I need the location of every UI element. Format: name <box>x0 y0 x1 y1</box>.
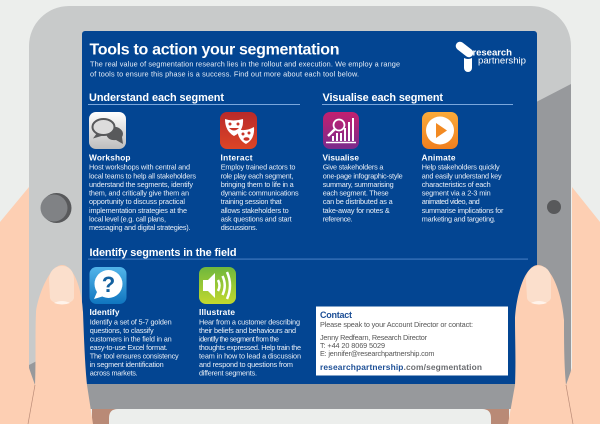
tool: workshop: local teams to help all stakeholders <box>89 171 196 180</box>
tool: visualise: summary, summarising <box>323 180 394 189</box>
tool: identify: across markets. <box>90 368 138 378</box>
intro text: of tools to ensure this phase is a success. Find out more about each tool below. <box>90 70 359 78</box>
icon: chart and magnifier <box>323 112 359 149</box>
tool: interact: ask questions and start <box>221 214 292 223</box>
tool: workshop: them, and critically give them an <box>89 189 189 198</box>
logo: research partnership: research <box>472 48 512 58</box>
tool: interact: dynamic communications <box>221 189 299 198</box>
screen <box>82 31 537 384</box>
intro text: The real value of segmentation research lies in the rollout and execution. We employ a range <box>90 60 400 68</box>
tool: illustrate: identify the segment from the <box>199 334 279 344</box>
tool: interact: Interact <box>220 152 253 162</box>
tool: interact: role play each segment, <box>221 171 293 180</box>
tool: identify <box>90 267 179 378</box>
tool: animate: animated video, and <box>422 197 480 206</box>
tool: interact <box>220 112 299 232</box>
tool: interact: training session that <box>221 197 282 206</box>
tool: illustrate: different segments. <box>199 368 257 378</box>
tool: illustrate: Hear from a customer describing <box>199 318 300 326</box>
tool: visualise: one-page infographic-style <box>323 171 403 180</box>
nail <box>526 266 551 304</box>
tool: identify: customers in the field in an <box>90 334 172 344</box>
tool: animate <box>422 112 504 223</box>
tool: workshop: Host workshops with central and <box>89 162 190 172</box>
tool: identify: Identify a set of 5-7 golden <box>90 318 172 326</box>
tool: workshop: local level (e.g. call plans, <box>89 214 166 223</box>
tool: workshop: understand the segments, identify <box>89 180 193 189</box>
heading: understand: Understand each segment <box>89 92 224 104</box>
right camera dot <box>547 200 561 214</box>
tool: illustrate: thoughts expressed. Help train the <box>199 343 301 352</box>
palm <box>0 187 35 424</box>
tool: illustrate: Illustrate <box>199 307 235 317</box>
nail moon <box>54 301 70 304</box>
tool: workshop: opportunity to discuss practical <box>89 197 185 206</box>
tool: animate: marketing and targeting. <box>422 214 496 223</box>
tool: identify: Identify <box>90 307 120 317</box>
tool: visualise: each segment. These <box>323 189 389 198</box>
tool: identify: in segment identification <box>90 360 164 369</box>
tool: visualise: can be distributed as a <box>323 197 394 206</box>
contact box: Contact <box>320 310 352 320</box>
tool: visualise <box>322 112 403 223</box>
thumb <box>508 265 573 424</box>
tool: visualise: Give stakeholders a <box>323 162 384 172</box>
tool: illustrate <box>199 267 301 378</box>
contact box: T: +44 20 8069 5029 <box>320 341 385 350</box>
contact box: Please speak to your Account Director or contact: <box>320 320 473 329</box>
heading: identify segments: Identify segments in the field <box>90 247 236 259</box>
tool: animate: characteristics of each <box>422 180 491 189</box>
thumb <box>28 265 93 424</box>
tool: visualise: take-away for notes & <box>323 206 390 215</box>
crease <box>28 385 35 424</box>
tool: illustrate: their beliefs and behaviours and <box>199 326 296 335</box>
intro text <box>90 60 400 78</box>
logo: research partnership: partnership <box>478 56 526 66</box>
title: Tools to action your segmentation <box>90 42 340 58</box>
tool: animate: Help stakeholders quickly <box>422 162 500 172</box>
icon: play button <box>422 112 458 149</box>
contact box: E: jennifer@researchpartnership.com <box>320 349 434 358</box>
tool: illustrate: and respond to questions from <box>199 360 293 369</box>
icon: theatre masks <box>220 112 257 149</box>
tool: interact: discussions. <box>221 223 257 232</box>
tool: animate: summarise implications for <box>422 206 504 215</box>
tool: animate: Animate <box>422 152 456 162</box>
icon: speaker <box>199 267 236 304</box>
tool: identify: questions, to classify <box>90 326 154 335</box>
tool: workshop: Workshop <box>89 152 130 162</box>
tool: illustrate: team in how to lead a discussion <box>199 352 301 360</box>
nail <box>49 266 74 304</box>
left side button <box>40 193 72 223</box>
tool: visualise: Visualise <box>322 152 359 162</box>
tool: visualise: reference. <box>323 214 353 223</box>
tool: identify: The tool ensures consistency <box>90 352 179 360</box>
nail moon <box>531 301 547 304</box>
logo: research partnership <box>460 46 526 72</box>
tool: workshop <box>89 112 196 232</box>
tool: animate: segment via a 2-3 min <box>422 189 491 198</box>
tool: animate: and easily understand key <box>422 171 502 180</box>
crease <box>566 385 573 424</box>
icon: question bubble: ? <box>102 272 115 297</box>
tool: workshop: messaging and digital strategies). <box>89 223 190 232</box>
contact box <box>316 306 508 376</box>
right hand <box>508 187 600 424</box>
tool: interact: bringing them to life in a <box>221 180 295 189</box>
contact box: Jenny Redfearn, Research Director <box>320 333 428 342</box>
tool: workshop: implementation strategies at the <box>89 206 187 215</box>
palm <box>566 187 600 424</box>
desk panel below the tablet <box>92 405 509 424</box>
left hand <box>0 187 93 424</box>
contact box: researchpartnership.com/segmentation <box>320 362 482 372</box>
tool: interact: Employ trained actors to <box>221 162 295 172</box>
heading: visualise: Visualise each segment <box>322 92 443 104</box>
icon: speech bubbles <box>89 112 126 149</box>
tool: interact: allows stakeholders to <box>221 206 289 215</box>
tool: identify: easy-to-use Excel format. <box>90 343 168 352</box>
